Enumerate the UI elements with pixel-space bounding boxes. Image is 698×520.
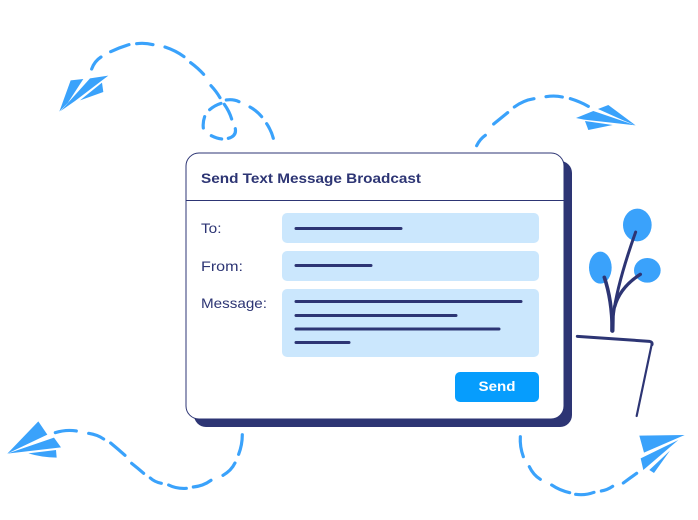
message form panel: [186, 153, 564, 419]
title: Send Text Message Broadcast: [201, 170, 421, 186]
paper plane with dashed trail: bottom left: [7, 421, 242, 488]
Message field: [282, 289, 539, 357]
paper plane with dashed trail: top right: [477, 96, 636, 146]
To field: [282, 213, 539, 243]
label: From: From:: [201, 258, 243, 274]
paper plane with dashed trail: bottom right: [520, 435, 685, 495]
paper plane with looping dashed trail: top left: [59, 43, 273, 139]
icon: left leaf: [589, 252, 612, 284]
label: To: To:: [201, 220, 222, 236]
icon: right leaf: [634, 258, 661, 283]
plant in pot: [577, 209, 661, 416]
card shadow: [194, 161, 572, 427]
plant stems: [604, 232, 640, 331]
Send button: [455, 372, 539, 402]
From field: [282, 251, 539, 281]
Send button: Send: [478, 378, 516, 394]
pot outline: [577, 336, 652, 416]
label: Message: Message:: [201, 295, 267, 311]
icon: top leaf: [623, 209, 652, 241]
